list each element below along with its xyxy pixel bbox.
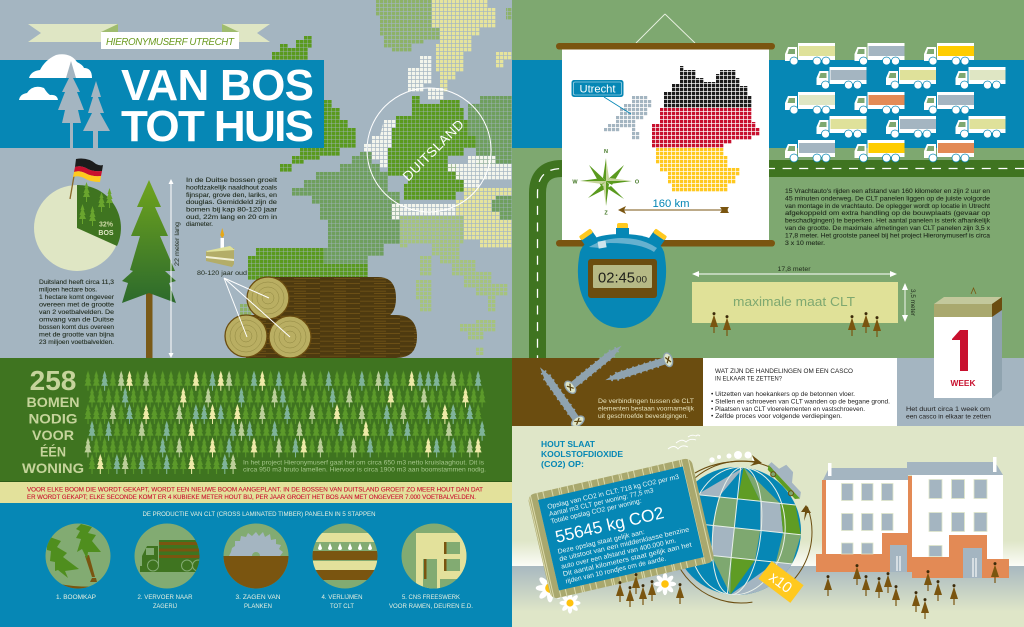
stacked logs — [224, 277, 417, 358]
title banner — [0, 54, 324, 151]
icon: calendar 1 week: WEEK — [950, 379, 976, 388]
text: forest area Germany: bossen komt dus overeen — [39, 324, 114, 331]
ribbon: Hieronymuserf Utrecht: HIERONYMUSERF UTRECHT — [106, 37, 235, 48]
panel: one week duration: een casco in elkaar te zetten — [906, 414, 991, 420]
text: types of trees — [186, 177, 278, 228]
panel: right background — [512, 0, 1024, 360]
icon: car on orbit — [765, 456, 809, 502]
heading: 258 trees needed: VOOR — [32, 427, 74, 443]
heading: 258 trees needed: WONING — [22, 460, 84, 476]
panel: assembly steps: • Stellen en schroeven van CLT wanden op de begane grond. — [711, 398, 890, 406]
icon: birthday cake — [197, 228, 247, 277]
width dimension: 17,8 meter: 17,8 meter — [778, 266, 811, 273]
callout: Utrecht: Utrecht — [580, 84, 616, 96]
heading: DE PRODUCTIE VAN CLT (CROSS LAMINATED TIMBER) PANELEN IN 5 STAPPEN — [142, 511, 376, 518]
distance arrow: 160 km — [618, 198, 729, 214]
panel: CLT production steps — [0, 503, 512, 627]
height dimension: 3,5 meter — [902, 283, 916, 322]
text: forest area Germany: 1 hectare komt ongeveer — [39, 294, 115, 301]
text: truck transport: 3 x 10 meter. — [785, 240, 825, 247]
right blue band — [512, 60, 1024, 148]
heading: 258 trees needed: NODIG — [28, 410, 78, 426]
heading: CO2: HOUT SLAAT — [541, 439, 596, 449]
stopwatch 02:45: 02:45 — [598, 270, 635, 286]
callout: Utrecht — [572, 80, 631, 114]
wooden board with CO2 figures — [527, 457, 715, 600]
wooden board with CO2 figures: 55645 kg CO2 — [553, 503, 666, 547]
text: project volume: In het project Hieronymuserf gaat het om circa 650 m3 netto kruislaaghout. Dit is — [243, 460, 484, 466]
step 5: CNC milling: 5. CNS FREESWERK — [402, 594, 461, 601]
text: truck transport: afgekoppeld om extra handling op de bouwplaats (gevaar op — [785, 210, 990, 217]
text: truck transport: 45 minuten onderweg. De CLT panelen liggen op de juiste volgorde — [785, 196, 990, 202]
fleet of 15 trucks — [785, 43, 1006, 162]
text: forest area Germany: overeen met de grootte — [39, 302, 114, 308]
text: types of trees: douglas. Gemiddeld zijn de — [186, 199, 277, 206]
icon: calendar 1 week — [934, 288, 1002, 398]
panel: 258 trees band — [0, 358, 512, 482]
icon: grey pine trees — [58, 61, 110, 148]
globe with orbit — [680, 451, 812, 604]
step 5: CNC milling — [389, 524, 473, 610]
tag: x10: x10 — [766, 569, 795, 597]
icon: large pine tree — [122, 180, 176, 358]
text: forest area Germany — [39, 279, 115, 346]
CLT panel with dimensions: maximale maat CLT — [733, 294, 855, 309]
pie chart: 32% forest — [34, 159, 121, 271]
step 1: tree felling — [45, 524, 110, 601]
panel: screws: De verbindingen tussen de CLT — [598, 398, 694, 405]
CLT panel with dimensions — [692, 266, 916, 337]
road markings — [538, 168, 1024, 358]
step 4: gluing: 4. VERLIJMEN — [322, 594, 363, 601]
title text: VAN BOS — [121, 61, 314, 110]
wooden board with CO2 figures: de uitstoot van een middenklasse benzine — [559, 526, 690, 563]
title text — [121, 61, 314, 151]
step 5: CNC milling: VOOR RAMEN, DEUREN E.D. — [389, 603, 473, 610]
circle highlighting Germany: DUITSLAND — [400, 117, 467, 184]
distance arrow: 160 km: 160 km — [652, 198, 690, 210]
heading: CO2: KOOLSTOFDIOXIDE — [541, 449, 623, 459]
heading: 258 trees needed: BOMEN — [26, 394, 80, 410]
stopwatch 02:45: 00 — [636, 274, 647, 284]
clouds on orbit — [709, 451, 756, 463]
text: forest area Germany: 23 miljoen voetbalvelden. — [39, 339, 114, 346]
forest of tree icons — [84, 371, 487, 474]
icon: compass rose: N — [604, 149, 608, 155]
icon: screws — [534, 340, 674, 429]
wall poster with map — [556, 14, 775, 246]
panel: CO2 sky — [512, 426, 1024, 566]
wooden board with CO2 figures: Totale opslag CO2 per woning: — [550, 498, 642, 526]
orange walls — [816, 476, 1009, 578]
road — [538, 168, 1024, 358]
panel: assembly steps — [703, 358, 897, 426]
icon: German flag — [70, 159, 103, 199]
text: types of trees: In de Duitse bossen groeit — [186, 177, 277, 184]
panel: one week duration: Het duurt circa 1 week om — [906, 406, 990, 413]
people on the ground — [616, 562, 999, 619]
text: forest area Germany: van 2 voetbalvelden. De — [39, 309, 114, 316]
text: forest area Germany: miljoen hectare bos. — [39, 286, 97, 294]
wooden board with CO2 figures: Opslag van CO2 in CLT: 718 kg CO2 per m3 — [547, 474, 680, 511]
step 4: gluing — [312, 524, 378, 610]
step 4: gluing: TOT CLT — [330, 603, 354, 610]
text: forest area Germany: Duitsland heeft circa 11,3 — [39, 279, 114, 286]
text: types of trees: bomen bij kap 80-120 jaar — [186, 206, 278, 214]
pointer lines to logs — [224, 278, 290, 337]
title text: TOT HUIS — [121, 102, 314, 151]
wooden board with CO2 figures: auto over een afstand van 400.000 km. — [561, 537, 677, 571]
orbit arrows — [695, 461, 760, 473]
dimension: 22 meter tall — [168, 179, 181, 358]
log ends — [225, 277, 311, 358]
panel: one week duration — [897, 358, 1024, 426]
panel: assembly steps: • Zelfde proces voor volgende verdiepingen. — [711, 413, 842, 420]
icon: compass rose: W — [572, 180, 578, 186]
text: truck transport: van de grootte. De maximale afmetingen van CLT panelen zijn 3,5 x — [785, 225, 991, 232]
panel: left background — [0, 0, 512, 360]
dimension: 22 meter tall: 22 meter lang — [174, 221, 181, 266]
heading: CO2: (CO2) OP: — [541, 459, 584, 469]
doors — [890, 545, 982, 578]
tag: x10 — [758, 561, 804, 603]
icon: clouds — [19, 54, 92, 100]
panel: assembly steps: IN ELKAAR TE ZETTEN? — [715, 376, 782, 382]
panel: screws — [512, 340, 703, 429]
icon: compass rose: Z — [604, 210, 608, 216]
step 3: saw — [224, 524, 288, 608]
map of Europe — [240, 0, 512, 355]
step 1: tree felling: 1. BOOMKAP — [56, 594, 96, 601]
step 2: truck transport: 2. VERVOER NAAR — [138, 594, 193, 601]
step 2: truck transport: ZAGERIJ — [153, 603, 177, 610]
text: project volume: circa 950 m3 bruto lamellen. Hiervoor is circa 1900 m3 aan boomstammen nodig. — [243, 466, 486, 474]
text: types of trees: hoofdzakelijk naaldhout zoals — [186, 184, 278, 192]
wooden board with CO2 figures: Dit aantal kilometers staat gelijk aan het — [562, 542, 693, 578]
panel: assembly steps: • Plaatsen van CLT vloerelementen en vastschroeven. — [711, 406, 865, 413]
Germany in flag colours — [652, 66, 760, 192]
pie chart: 32% forest: BOS — [98, 230, 114, 237]
panel: assembly steps: WAT ZIJN DE HANDELINGEN OM EEN CASCO — [715, 368, 853, 375]
panel: screws: uit geschroefde bevestigingen. — [598, 413, 688, 420]
text: truck transport — [785, 188, 991, 247]
Netherlands in grey — [604, 96, 652, 140]
text: truck transport: 17,8 meter. Het grootste paneel bij het project Hieronymuserf is circa — [785, 232, 990, 240]
text: types of trees: diameter. — [186, 221, 213, 228]
text: truck transport: beschadigingen) te beperken. Het aantal panelen is sterk afhankelijk — [785, 218, 991, 224]
width dimension: 17,8 meter — [692, 266, 897, 277]
text: project volume — [243, 460, 486, 474]
step 3: saw: PLANKEN — [244, 603, 272, 610]
globe — [685, 467, 801, 595]
stopwatch 02:45 — [578, 223, 667, 328]
panel: screws: elementen bestaan voornamelijk — [598, 406, 695, 412]
pie chart: 32% forest: 32% — [99, 222, 114, 228]
icon: birds — [668, 435, 700, 449]
heading: 258 trees needed: 258 — [30, 365, 76, 396]
heading: CO2 — [541, 439, 623, 469]
panel: replanting note: ER WORDT GEKAPT; ELKE SECONDE KOMT ER 4 KUBIEKE METER HOUT BIJ, PER JAAR GROEIT HET BOS AAN MET ONGEVEER 7.000 VOETBALVELDEN. — [27, 494, 476, 501]
building — [816, 457, 1009, 578]
flowers — [536, 573, 676, 614]
text: types of trees: oud, 22m lang en 20 cm in — [186, 214, 277, 221]
panel: replanting note: VOOR ELKE BOOM DIE WORDT GEKAPT, WORDT EEN NIEUWE BOOM AANGEPLANT. IN DE BOSSEN VAN DUITSLAND GROEIT ZO MEER HOUT DAN DAT — [27, 486, 483, 494]
text: forest area Germany: met de grootte van bijna — [39, 332, 114, 338]
windows — [842, 480, 987, 556]
panel: assembly steps: • Uitzetten van hoekankers op de betonnen vloer. — [711, 391, 855, 398]
step 2: truck transport — [134, 524, 204, 610]
wooden board with CO2 figures: Aantal m3 CLT per woning: 77,5 m3 — [548, 487, 654, 518]
heading: 258 trees needed: ÉÉN — [40, 444, 66, 460]
text: types of trees: fijnspar, grove den, lariks, en — [186, 192, 277, 199]
icon: compass rose: O — [635, 180, 640, 186]
wooden board with CO2 figures: rijden van 10 rondjes om de aarde. — [565, 555, 667, 585]
text: forest area Germany: omvang van de Duitse — [39, 316, 114, 324]
icon: birthday cake: 80-120 jaar oud — [197, 270, 247, 277]
panel: CO2 ground — [512, 566, 1024, 627]
wooden board with CO2 figures: Deze opslag staat gelijk aan: — [557, 529, 645, 556]
circle highlighting Germany — [367, 88, 491, 212]
height dimension: 3,5 meter: 3,5 meter — [909, 289, 916, 317]
step 3: saw: 3. ZAGEN VAN — [236, 594, 281, 601]
heading: 258 trees needed — [22, 365, 84, 476]
text: truck transport: 15 Vrachtauto's rijden een afstand van 160 kilometer en zijn 2 uur en — [785, 188, 990, 195]
ribbon: Hieronymuserf Utrecht — [28, 24, 270, 49]
people for scale — [710, 312, 881, 337]
panel: replanting note — [0, 482, 512, 503]
text: truck transport: van montage in de vrachtauto. De oplegger wordt op locatie in Utrecht — [785, 203, 990, 210]
icon: compass rose — [572, 149, 640, 216]
